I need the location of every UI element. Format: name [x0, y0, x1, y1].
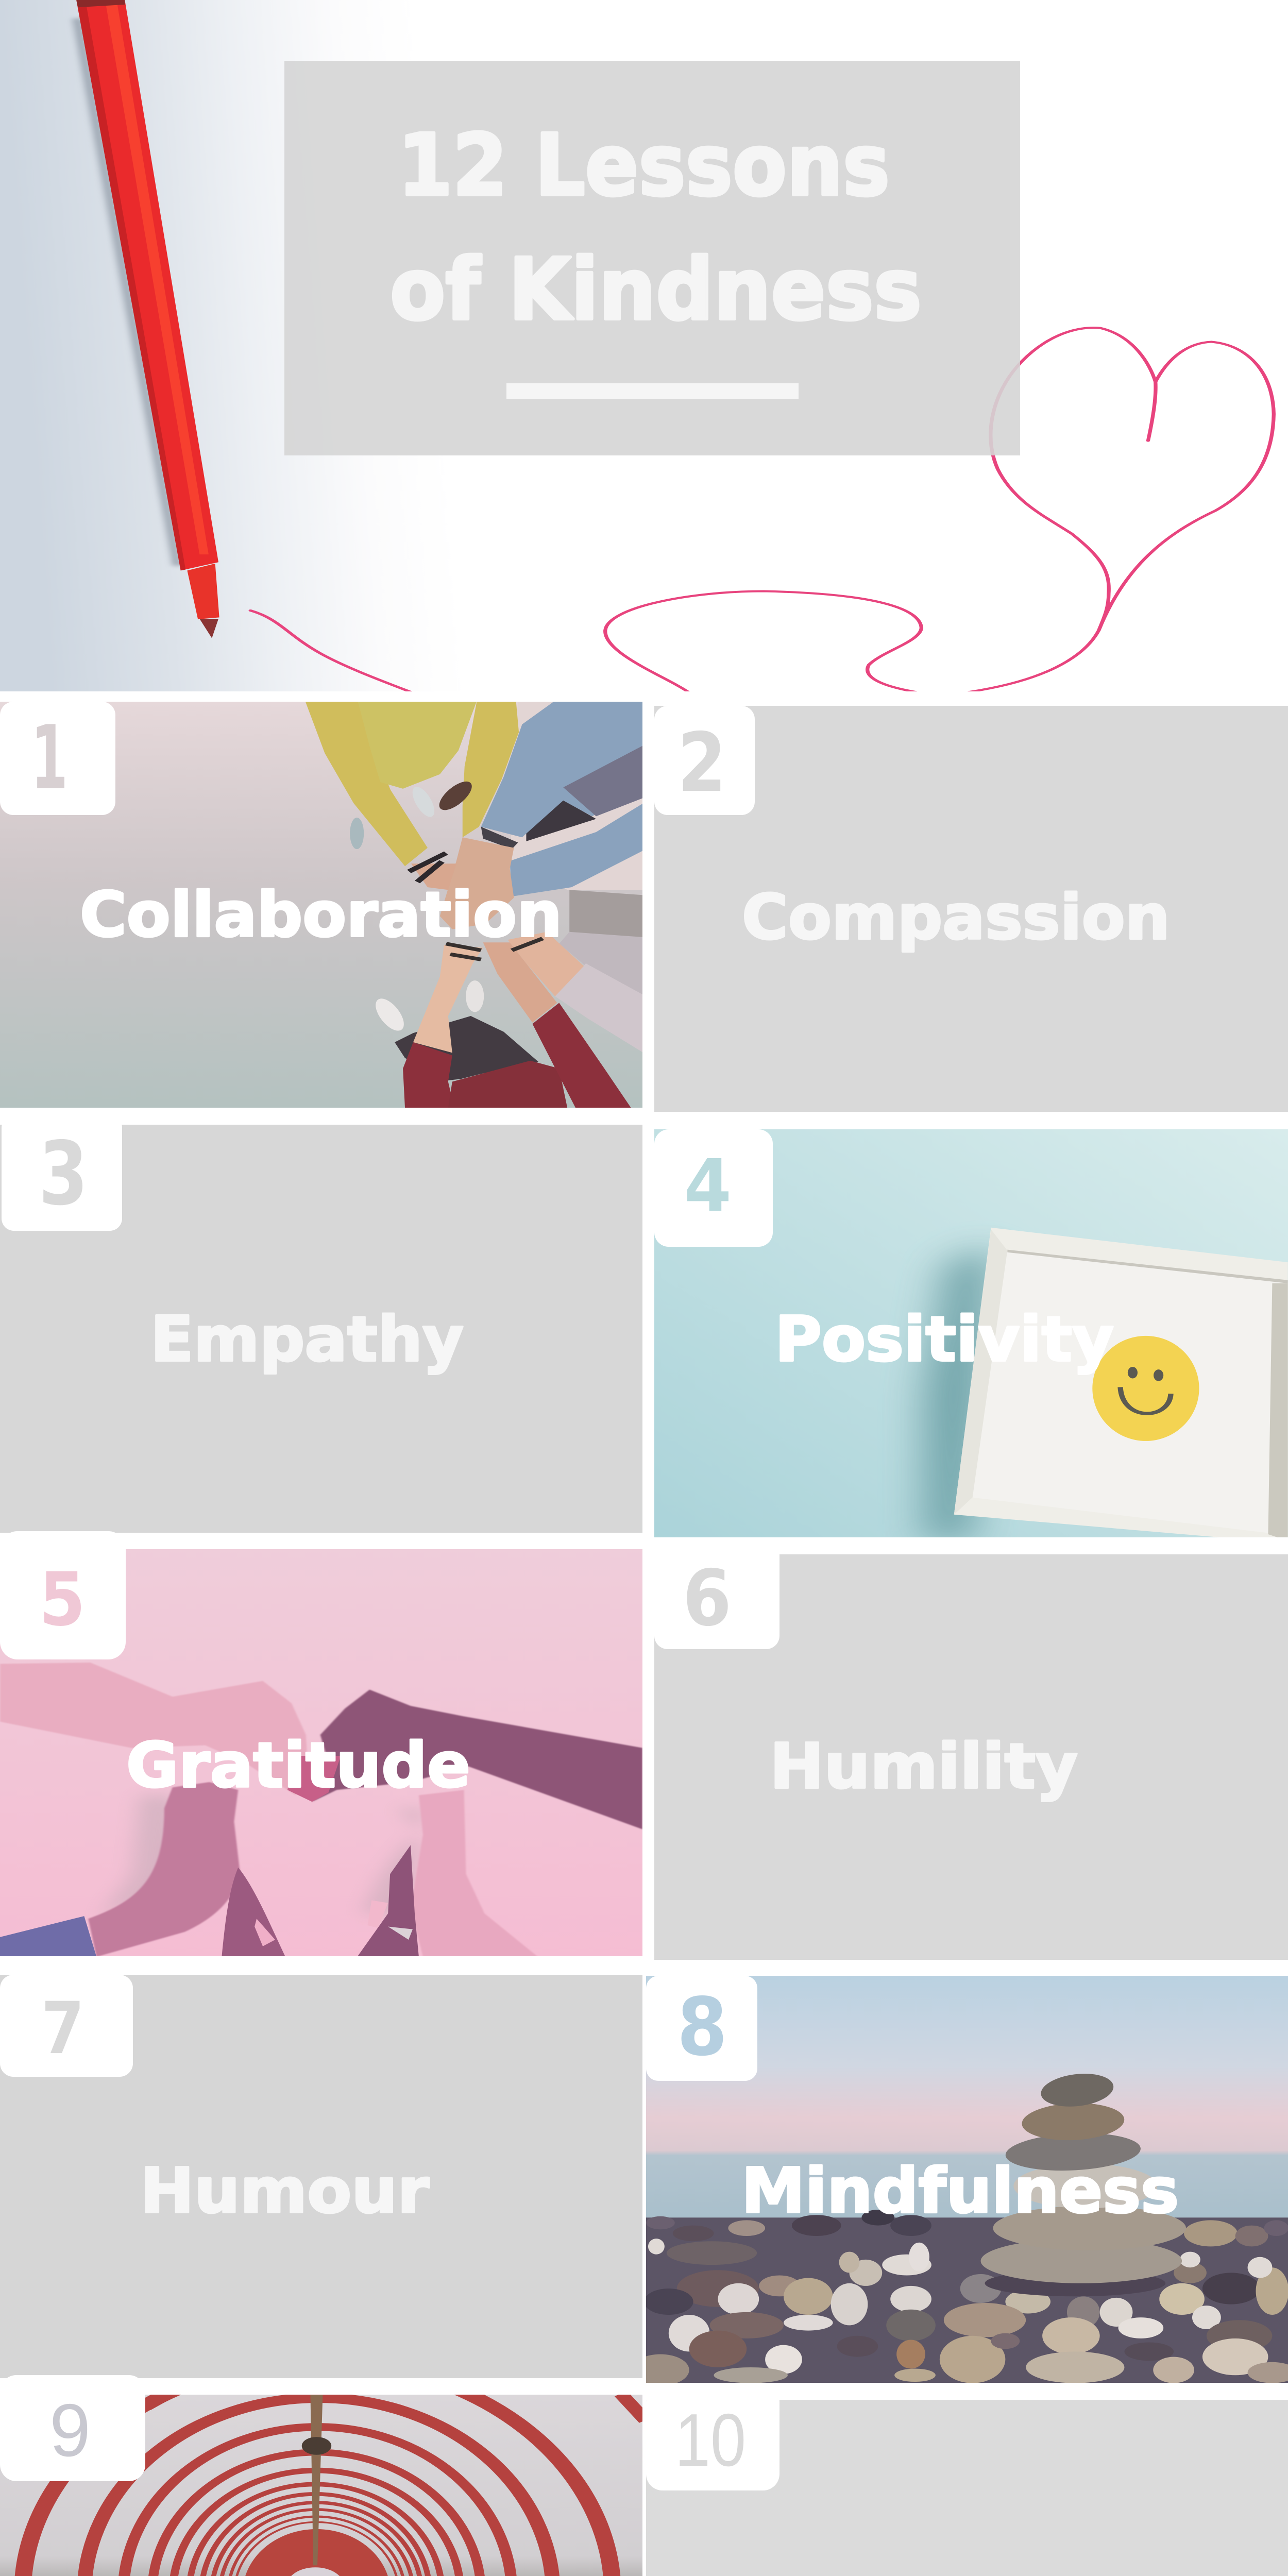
- number badge: 7: [41, 1987, 84, 2070]
- photo: hands forming a heart: [0, 1546, 645, 1958]
- number badge: 10: [675, 2398, 746, 2482]
- number badge: 9: [49, 2388, 91, 2472]
- icon: red felt pen: [72, 0, 219, 638]
- label: Collaboration: [80, 879, 562, 951]
- label: Gratitude: [126, 1730, 470, 1802]
- panel background: [646, 2400, 1288, 2576]
- title: of Kindness: [390, 240, 922, 339]
- title: 12 Lessons: [398, 116, 890, 215]
- icon: pink heart line: [250, 328, 1274, 692]
- label: Empathy: [150, 1304, 464, 1376]
- number badge: [654, 1538, 779, 1649]
- number badge: [654, 1129, 773, 1247]
- label: Compassion: [742, 882, 1170, 954]
- number badge: 3: [39, 1123, 88, 1225]
- label: Humour: [140, 2156, 429, 2227]
- panel: 10 Honesty: [646, 2385, 1288, 2576]
- number badge: [0, 2375, 145, 2481]
- number badge: [646, 2385, 779, 2490]
- number badge: 5: [39, 1556, 86, 1642]
- number badge: 2: [677, 716, 726, 810]
- panel background: [0, 1125, 642, 1533]
- panel: 8 Mindfulness: [632, 1973, 1288, 2386]
- title panel: [284, 61, 1020, 455]
- photo: hands stacked together: [0, 701, 646, 1111]
- number badge: [0, 1531, 126, 1659]
- photo: stone stack on pebble beach: [632, 1973, 1288, 2386]
- number badge: 4: [684, 1144, 732, 1228]
- panel background: [0, 1975, 642, 2378]
- title underline: [506, 383, 799, 399]
- panel: 1 Collaboration: [0, 701, 646, 1111]
- number badge: [0, 702, 115, 815]
- number badge: 6: [683, 1554, 732, 1643]
- panel: 3 Empathy: [0, 1115, 642, 1533]
- label: Positivity: [775, 1304, 1114, 1376]
- panel: 2 Compassion: [654, 706, 1288, 1112]
- label: Mindfulness: [741, 2156, 1179, 2227]
- photo: smiley in white frame: [644, 1128, 1288, 1541]
- photo: red arched walkway tunnel: [0, 2362, 646, 2576]
- number badge: [0, 1975, 133, 2077]
- number badge: [646, 1976, 757, 2081]
- number badge: [2, 1115, 122, 1231]
- label: Humility: [770, 1731, 1078, 1803]
- panel: 4 Positivity: [644, 1128, 1288, 1541]
- number badge: 8: [677, 1980, 727, 2074]
- title: [390, 116, 922, 339]
- panel: 6 Humility: [654, 1538, 1288, 1960]
- number badge: [654, 706, 755, 815]
- panel background: [654, 1554, 1288, 1960]
- panel background: [654, 706, 1288, 1112]
- panel: 7 Humour: [0, 1975, 642, 2378]
- number badge: 1: [31, 707, 68, 809]
- panel: 5 Gratitude: [0, 1531, 645, 1958]
- header photo: red pen and heart line: [0, 0, 1288, 692]
- panel: 9 Perspective: [0, 2362, 646, 2576]
